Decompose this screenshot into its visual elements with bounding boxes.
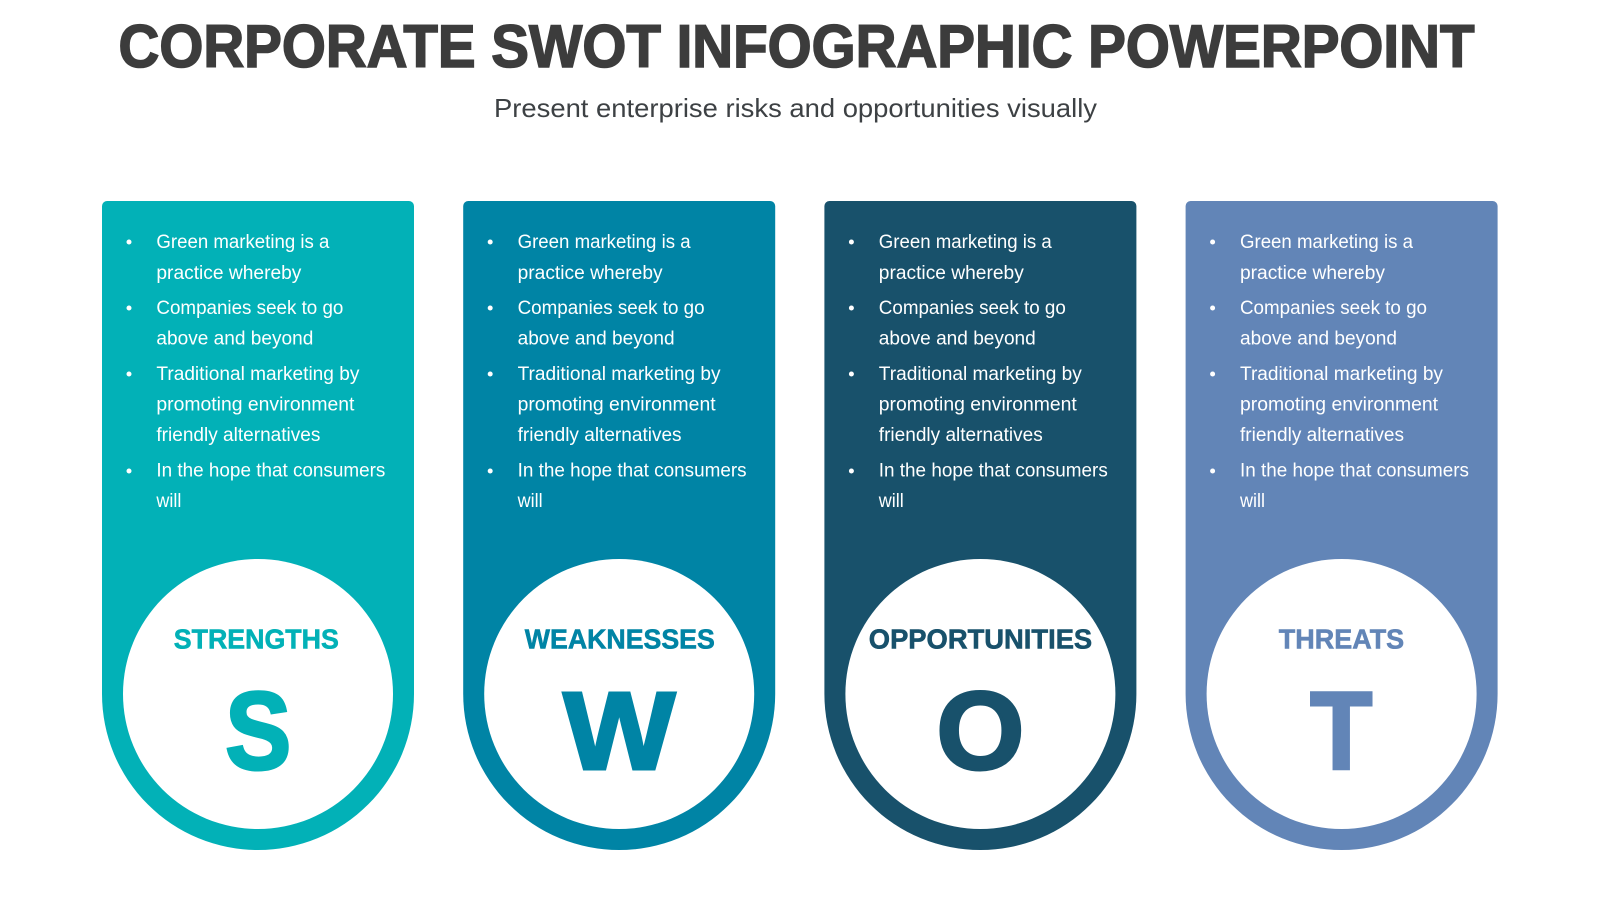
label: opportunities: OPPORTUNITIES bbox=[869, 624, 1092, 654]
bullet list: promoting environment bbox=[518, 394, 716, 416]
bullet list: friendly alternatives bbox=[156, 425, 320, 446]
bullet list: above and beyond bbox=[156, 328, 313, 350]
bullet list: will bbox=[1239, 491, 1265, 512]
bullet list: Companies seek to go bbox=[518, 298, 705, 319]
letter O: O bbox=[936, 670, 1024, 793]
bullet list: In the hope that consumers bbox=[879, 460, 1108, 482]
label: weaknesses: WEAKNESSES bbox=[525, 624, 715, 654]
white circle bbox=[123, 559, 393, 829]
card shape bbox=[1186, 201, 1498, 850]
bullet list: promoting environment bbox=[879, 394, 1078, 416]
bullet list: above and beyond bbox=[518, 328, 675, 350]
bullet list: will bbox=[155, 491, 181, 512]
bullet list: Traditional marketing by bbox=[879, 364, 1082, 385]
bullet list: practice whereby bbox=[518, 263, 663, 284]
bullet list: practice whereby bbox=[879, 263, 1024, 284]
panel: strengths bbox=[102, 201, 414, 850]
bullet list: will bbox=[878, 491, 904, 512]
bullet list: practice whereby bbox=[1240, 263, 1386, 284]
white circle bbox=[484, 559, 754, 829]
bullet list: Companies seek to go bbox=[879, 298, 1066, 319]
bullet list bbox=[849, 232, 1108, 512]
bullet list: Green marketing is a bbox=[518, 232, 691, 253]
bullet list: friendly alternatives bbox=[879, 425, 1043, 446]
bullet list bbox=[1210, 232, 1469, 512]
bullet list: friendly alternatives bbox=[518, 425, 682, 446]
panel: opportunities bbox=[824, 201, 1136, 850]
card shape bbox=[102, 201, 414, 850]
bullet list: Traditional marketing by bbox=[156, 364, 360, 385]
bullet list: friendly alternatives bbox=[1240, 425, 1404, 446]
bullet list: promoting environment bbox=[156, 394, 355, 416]
bullet list: In the hope that consumers bbox=[1240, 460, 1469, 482]
label: threats: THREATS bbox=[1279, 624, 1404, 654]
letter T: T bbox=[1310, 670, 1372, 793]
bullet list bbox=[126, 232, 385, 512]
white circle bbox=[1207, 559, 1477, 829]
white circle bbox=[845, 559, 1115, 829]
card shape bbox=[824, 201, 1136, 850]
bullet list: Companies seek to go bbox=[1240, 298, 1427, 319]
bullet list: above and beyond bbox=[879, 328, 1036, 350]
bullet list: Traditional marketing by bbox=[1240, 364, 1443, 385]
bullet list: Traditional marketing by bbox=[518, 364, 721, 385]
bullet list: Companies seek to go bbox=[156, 298, 343, 319]
bullet list: practice whereby bbox=[156, 263, 302, 284]
bullet list bbox=[488, 232, 747, 512]
letter W: W bbox=[563, 670, 675, 793]
label: strengths: STRENGTHS bbox=[174, 624, 339, 654]
card shape bbox=[463, 201, 775, 850]
bullet list: promoting environment bbox=[1240, 394, 1439, 416]
panel: weaknesses bbox=[463, 201, 775, 850]
bullet list: In the hope that consumers bbox=[518, 460, 747, 482]
letter S: S bbox=[225, 670, 291, 793]
bullet list: Green marketing is a bbox=[1240, 232, 1413, 253]
subtitle: Present enterprise risks and opportunities visually bbox=[494, 93, 1097, 123]
panel: threats bbox=[1186, 201, 1498, 850]
bullet list: Green marketing is a bbox=[879, 232, 1052, 253]
bullet list: will bbox=[517, 491, 543, 512]
bullet list: In the hope that consumers bbox=[156, 460, 385, 482]
bullet list: Green marketing is a bbox=[156, 232, 330, 253]
title: CORPORATE SWOT INFOGRAPHIC POWERPOINT bbox=[118, 13, 1474, 80]
bullet list: above and beyond bbox=[1240, 328, 1397, 350]
